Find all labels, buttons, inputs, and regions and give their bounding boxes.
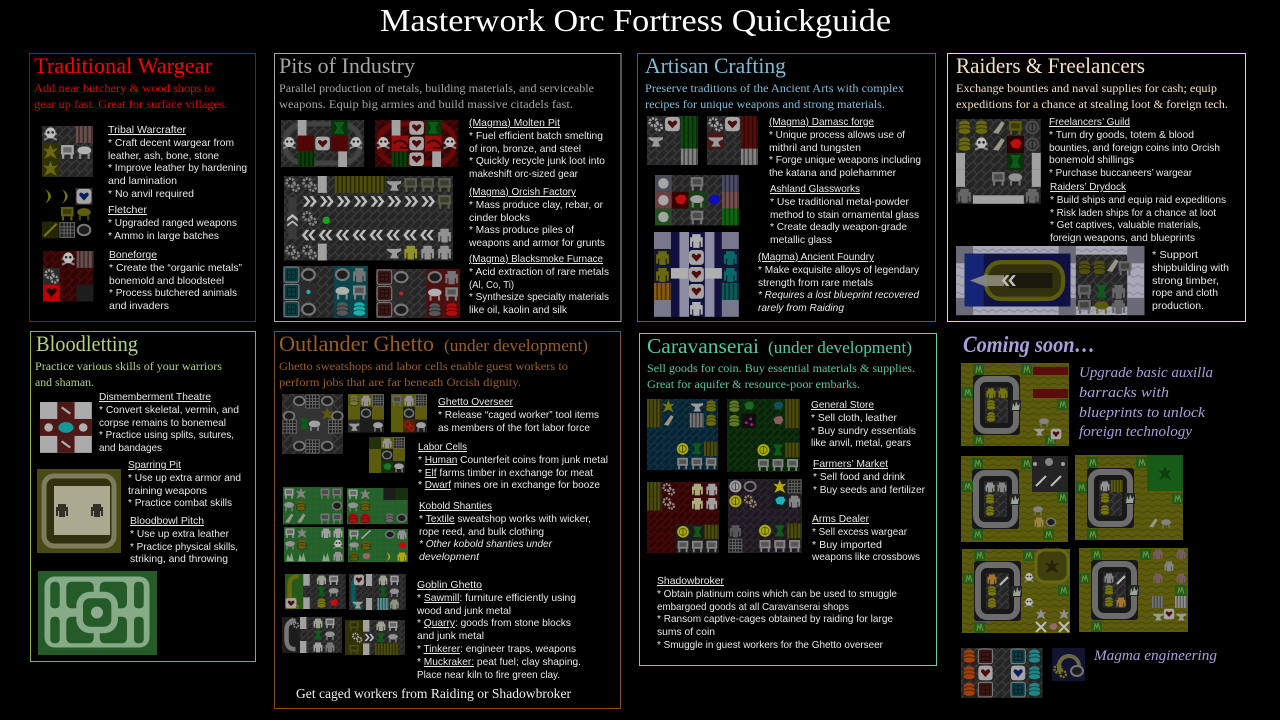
text block: Tribal Warcrafter: leather, ash, bone, stone (108, 151, 219, 162)
heading: Caravanserai: Caravanserai (647, 334, 759, 358)
text block: General Store: * Sell cloth, leather (811, 413, 898, 424)
intro text: and shaman. (35, 375, 94, 389)
intro text (35, 359, 222, 389)
intro text: Parallel production of metals, building materials, and serviceable (279, 81, 594, 95)
heading: Bloodletting: Bloodletting (36, 331, 138, 356)
text block: barracks upgrade note: barracks with (1079, 385, 1169, 401)
text block: Ancient Foundry: strength from rare metals (758, 278, 873, 289)
text block: Ashland Glassworks (770, 184, 919, 246)
text block: Labor Cells: Labor Cells (418, 442, 467, 453)
text block: Boneforge: * Create the “organic metals” (109, 263, 243, 274)
heading: Caravanserai (647, 334, 912, 358)
text block: Tribal Warcrafter: * Improve leather by hardening (108, 163, 247, 174)
intro text: weapons. Equip big armies and build massive citadels fast. (279, 97, 573, 111)
text block: Raiders Drydock: foreign weapons, and blueprints (1050, 233, 1195, 244)
icon: general store layout (647, 399, 718, 470)
text block: Orcish Factory: weapons and armor for grunts (468, 238, 605, 249)
text block: Bloodbowl Pitch: * Practice physical skills, (130, 542, 238, 553)
text block: Freelancers Guild: * Purchase buccaneers’ wargear (1049, 168, 1193, 179)
text block: Bloodbowl Pitch: striking, and throwing (130, 554, 228, 565)
intro text: Practice various skills of your warriors (35, 359, 222, 373)
heading: Caravanserai: (under development) (768, 338, 912, 357)
text block: General Store (811, 400, 916, 449)
icon: raiders drydock layout (956, 246, 1144, 315)
text block: Kobold Shanties: rope reed, and bulk clothing (419, 527, 544, 538)
text block: Fletcher: * Upgraded ranged weapons (108, 218, 237, 229)
text block: Boneforge (109, 250, 243, 312)
icon: farmers market layout (727, 399, 800, 472)
text block: Arms Dealer: Arms Dealer (812, 514, 870, 525)
text block: Goblin Ghetto: * Sawmill: furniture efficiently using (417, 593, 576, 604)
icon: upgraded barracks D (962, 549, 1070, 633)
text block: Blacksmoke Furnace: (Al, Co, Ti) (469, 280, 514, 291)
text block: Molten Pit: (Magma) Molten Pit (469, 118, 560, 129)
text block: Arms Dealer: weapons like crossbows (811, 552, 920, 563)
text block: General Store: like anvil, metal, gears (811, 438, 911, 449)
text block: Arms Dealer: * Buy imported (812, 540, 882, 551)
text block: Molten Pit: * Fuel efficient batch smelting (469, 131, 603, 142)
text block: Ashland Glassworks: Ashland Glassworks (770, 184, 860, 195)
text block: Ashland Glassworks: method to stain ornamental glass (770, 210, 919, 221)
text block: Boneforge: bonemold and bloodsteel (109, 276, 224, 287)
panel: Outlander Ghetto (274, 331, 620, 708)
text block: Dismemberment Theatre: corpse remains to bonemeal (99, 418, 226, 429)
text block: Fletcher: * Ammo in large batches (108, 231, 219, 242)
text block: Fletcher: Fletcher (108, 205, 148, 216)
heading: Pits of Industry: Pits of Industry (279, 53, 415, 78)
text block: Tribal Warcrafter (108, 125, 247, 200)
panel: Bloodletting (30, 331, 256, 662)
heading: Raiders & Freelancers: Raiders & Freelancers (956, 53, 1145, 78)
icon: damasc forge layout (647, 116, 698, 165)
text block: Freelancers Guild: Freelancers’ Guild (1049, 117, 1130, 128)
text block: Ghetto Overseer: as members of the fort labor force (438, 423, 590, 434)
text block: Goblin Ghetto: * Muckraker: peat fuel; clay shaping. (417, 657, 581, 668)
panel: Traditional Wargear (30, 53, 256, 322)
text block: Blacksmoke Furnace: * Acid extraction of rare metals (469, 267, 609, 278)
text block: Molten Pit: of iron, bronze, and steel (469, 144, 581, 155)
heading: Outlander Ghetto (279, 331, 588, 356)
text block: Ghetto Overseer: * Release “caged worker” tool items (438, 410, 599, 421)
text block: Ancient Foundry: * Make exquisite alloys of legendary (758, 265, 920, 276)
icon: dismemberment theatre layout (40, 402, 92, 453)
heading: Outlander Ghetto: Outlander Ghetto (279, 331, 434, 356)
text block: Farmers Market: * Sell food and drink (813, 472, 906, 483)
text block: Sparring Pit: Sparring Pit (128, 460, 181, 471)
text block: Raiders Drydock: * Get captives, valuable materials, (1050, 220, 1201, 231)
text block: Shadowbroker: Shadowbroker (657, 576, 725, 587)
text block: barracks upgrade note: blueprints to unlock (1079, 405, 1205, 421)
icon: upgraded barracks C (1075, 455, 1183, 540)
intro text (645, 81, 904, 111)
icon: boneforge workshop (43, 251, 93, 301)
panel: Caravanserai (640, 334, 936, 666)
icon: labor cell 3 (369, 437, 405, 473)
text block: Goblin Ghetto: and junk metal (417, 631, 484, 642)
text block: Sparring Pit (128, 460, 241, 509)
text block: Arms Dealer: * Sell excess wargear (812, 527, 908, 538)
text block: Sparring Pit: * Use up extra armor and (128, 473, 241, 484)
text block: Shadowbroker: * Smuggle in guest workers for the Ghetto overseer (657, 640, 884, 651)
text block: Ghetto Overseer (438, 397, 599, 434)
intro text (647, 361, 915, 391)
text block: Shadowbroker: embargoed goods at all Caravanserai shops (657, 602, 849, 613)
text block: Shadowbroker: * Ransom captive-cages obtained by raiding for large (657, 614, 893, 625)
text block: Goblin Ghetto: Place near kiln to fire green clay. (417, 670, 560, 681)
icon: labor cell 2 (391, 394, 427, 432)
text block: Goblin Ghetto (416, 580, 581, 681)
icon: upgraded barracks E (1079, 548, 1188, 632)
text block: Kobold Shanties: * Textile sweatshop works with wicker, (419, 514, 591, 525)
text block: Blacksmoke Furnace (469, 254, 609, 316)
intro text: Ghetto sweatshops and labor cells enable guest workers to (279, 359, 568, 373)
icon: magma molten pit layout (375, 120, 458, 167)
text block: Blacksmoke Furnace: (Magma) Blacksmoke Furnace (469, 254, 603, 265)
text block: Dismemberment Theatre: Dismemberment Theatre (99, 392, 211, 403)
text block: Damasc forge: the katana and polehammer (769, 168, 897, 179)
intro text (279, 81, 594, 111)
text block: Tribal Warcrafter: * No anvil required (108, 189, 194, 200)
icon: upgraded barracks A (961, 363, 1069, 446)
icon: goblin tinkerer (282, 617, 342, 653)
text block: Ashland Glassworks: metallic glass (770, 235, 832, 246)
panel: Artisan Crafting (638, 53, 936, 322)
text block: shipbuilding support: strong timber, (1152, 276, 1219, 287)
callout: caged workers: Get caged workers from Raiding or Shadowbroker (296, 686, 572, 701)
label: Magma engineering: Magma engineering (1093, 648, 1217, 664)
text block: Ancient Foundry: * Requires a lost blueprint recovered (758, 290, 920, 301)
icon: upgraded barracks B (961, 456, 1068, 542)
text block: Farmers Market: * Buy seeds and fertilizer (813, 485, 926, 496)
text block: Shadowbroker (657, 576, 897, 651)
text block: Raiders Drydock: Raiders’ Drydock (1050, 182, 1127, 193)
text block: Orcish Factory: * Mass produce piles of (469, 225, 574, 236)
icon: kobold shanty 4 (348, 529, 408, 562)
text block: Dismemberment Theatre: * Practice using splits, sutures, (99, 430, 234, 441)
text block: Kobold Shanties (419, 501, 591, 563)
panel: Raiders & Freelancers (948, 53, 1246, 322)
text block: Bloodbowl Pitch: Bloodbowl Pitch (130, 516, 204, 527)
text block: Blacksmoke Furnace: like oil, kaolin and silk (469, 305, 568, 316)
text block: barracks upgrade note: Upgrade basic auxilla (1079, 365, 1213, 381)
text block: Dismemberment Theatre: and bandages (99, 443, 162, 454)
text block: Sparring Pit: * Practice combat skills (128, 498, 232, 509)
intro text (34, 81, 227, 111)
intro text: Exchange bounties and naval supplies for cash; equip (956, 81, 1217, 95)
text block: Damasc forge: mithril and tungsten (769, 143, 861, 154)
intro text: perform jobs that are far beneath Orcish dignity. (279, 375, 521, 389)
text block: Labor Cells: * Dwarf mines ore in exchange for booze (418, 480, 600, 491)
icon: ashland glassworks layout (655, 175, 739, 225)
icon: fletcher workshop (42, 188, 92, 238)
icon: kobold shanty 2 (347, 488, 408, 524)
text block: shipbuilding support: shipbuilding with (1152, 263, 1229, 274)
icon: molten pit layout (281, 120, 364, 167)
text block: Ashland Glassworks: * Create deadly weapon-grade (770, 222, 907, 233)
icon: shadowbroker layout (728, 479, 802, 553)
text block: Dismemberment Theatre: * Convert skeletal, vermin, and (99, 405, 239, 416)
intro text (279, 359, 568, 389)
text block: Kobold Shanties: Kobold Shanties (419, 501, 492, 512)
intro text: Add near butchery & wood shops to (34, 81, 214, 95)
text block: shipbuilding support (1152, 250, 1229, 312)
text block: Damasc forge: (Magma) Damasc forge (769, 117, 874, 128)
text block: barracks upgrade note: foreign technology (1079, 424, 1192, 440)
text block: Ancient Foundry: rarely from Raiding (758, 303, 844, 314)
text block: Damasc forge: * Unique process allows use of (769, 130, 905, 141)
text block: Tribal Warcrafter: * Craft decent wargear from (108, 138, 234, 149)
icon: magma engineering pump (1052, 648, 1085, 681)
intro text (956, 81, 1228, 111)
text block: Ghetto Overseer: Ghetto Overseer (438, 397, 514, 408)
intro text: recipes for unique weapons and strong materials. (645, 97, 885, 111)
intro text: expeditions for a chance at stealing loot & foreign tech. (956, 97, 1228, 111)
text block: shipbuilding support: * Support (1152, 250, 1198, 261)
heading: Artisan Crafting: Artisan Crafting (645, 53, 786, 78)
text block: Boneforge: Boneforge (109, 250, 157, 261)
text block: Shadowbroker: * Obtain platinum coins which can be used to smuggle (657, 589, 897, 600)
icon: goblin muckraker (345, 620, 405, 655)
text block: Ashland Glassworks: * Use traditional metal-powder (770, 197, 910, 208)
text block: Orcish Factory: cinder blocks (469, 213, 530, 224)
icon: magma engineering furnace layout (961, 648, 1043, 698)
text block: General Store: General Store (811, 400, 874, 411)
panel: Pits of Industry (274, 53, 621, 322)
text block: Farmers Market: Farmers’ Market (813, 459, 888, 470)
text block: Orcish Factory: (Magma) Orcish Factory (469, 187, 577, 198)
text block: Ancient Foundry: (Magma) Ancient Foundry (758, 252, 875, 263)
text block: Goblin Ghetto: * Quarry: goods from stone blocks (417, 618, 571, 629)
icon: goblin quarry (349, 574, 406, 610)
icon: red blacksmoke furnace layout (376, 269, 460, 318)
text block: Kobold Shanties: * Other kobold shanties under (419, 539, 553, 550)
text block: Molten Pit: * Quickly recycle junk loot into (469, 156, 605, 167)
text block: Sparring Pit: training weapons (128, 486, 207, 497)
text block: shipbuilding support: rope and cloth (1152, 288, 1218, 299)
intro text: Great for aquifer & resource-poor embarks. (647, 377, 860, 391)
text block: Arms Dealer (811, 514, 920, 563)
text block: Raiders Drydock: * Risk laden ships for a chance at loot (1050, 208, 1216, 219)
icon: sparring pit layout (37, 469, 121, 553)
text block: Tribal Warcrafter: Tribal Warcrafter (108, 125, 187, 136)
text block: Freelancers Guild (1049, 117, 1220, 179)
text block: barracks upgrade note (1079, 365, 1213, 440)
text block: Boneforge: and invaders (109, 301, 169, 312)
intro text: Sell goods for coin. Buy essential materials & supplies. (647, 361, 915, 375)
text block: Blacksmoke Furnace: * Synthesize specialty materials (469, 292, 609, 303)
panel: Coming soon (961, 332, 1217, 698)
text block: Labor Cells (418, 442, 608, 491)
text block: Labor Cells: * Human Counterfeit coins from junk metal (418, 455, 608, 466)
heading: Coming soon: Coming soon… (963, 332, 1095, 357)
text block: Damasc forge (769, 117, 921, 179)
icon: orcish factory layout (284, 176, 453, 260)
text block: Freelancers Guild: * Turn dry goods, totem & blood (1049, 130, 1194, 141)
text block: Damasc forge: * Forge unique weapons including (769, 155, 921, 166)
icon: arms dealer layout (647, 482, 719, 553)
icon: goblin sawmill (285, 574, 346, 609)
icon: kobold shanty 1 (283, 487, 343, 524)
text block: Boneforge: * Process butchered animals (109, 288, 237, 299)
text block: Ancient Foundry (758, 252, 920, 314)
text block: General Store: * Buy sundry essentials (811, 426, 916, 437)
text block: Molten Pit: makeshift orc-sized gear (469, 169, 579, 180)
text block: Kobold Shanties: development (419, 552, 480, 563)
text block: Tribal Warcrafter: and lamination (108, 176, 177, 187)
icon: tribal warcrafter workshop (42, 126, 93, 177)
text block: Bloodbowl Pitch: * Use up extra leather (130, 529, 230, 540)
text block: Farmers Market (813, 459, 926, 496)
text block: Raiders Drydock (1050, 182, 1226, 244)
title: Masterwork Orc Fortress Quickguide (380, 2, 891, 38)
text block: Goblin Ghetto: * Tinkerer: engineer traps, weapons (417, 644, 576, 655)
text block: Dismemberment Theatre (99, 392, 239, 454)
icon: ghetto overseer layout (282, 394, 343, 454)
heading: Traditional Wargear: Traditional Wargear (34, 53, 213, 78)
icon: magma damasc forge layout (707, 116, 758, 165)
icon: ancient foundry layout (654, 232, 739, 317)
text block: Fletcher (108, 205, 237, 242)
text block: shipbuilding support: production. (1152, 301, 1204, 312)
text block: Molten Pit (469, 118, 605, 180)
text block: Labor Cells: * Elf farms timber in exchange for meat (418, 468, 593, 479)
text block: Orcish Factory: * Mass produce clay, rebar, or (469, 200, 604, 211)
text block: Shadowbroker: sums of coin (657, 627, 715, 638)
text block: Goblin Ghetto: Goblin Ghetto (417, 580, 482, 591)
intro text: Preserve traditions of the Ancient Arts with complex (645, 81, 904, 95)
text block: Bloodbowl Pitch (130, 516, 238, 565)
intro text: gear up fast. Great for surface villages. (34, 97, 227, 111)
text block: Freelancers Guild: bonemold shillings (1049, 155, 1134, 166)
heading: Outlander Ghetto: (under development) (444, 336, 588, 355)
icon: acid blacksmoke furnace layout (283, 266, 368, 318)
text block: Orcish Factory (468, 187, 605, 249)
text block: Freelancers Guild: bounties, and foreign coins into Orcish (1049, 143, 1220, 154)
icon: kobold shanty 3 (284, 527, 344, 562)
icon: freelancers guild layout (956, 119, 1041, 204)
icon: bloodbowl pitch layout (38, 571, 157, 655)
icon: labor cell 1 (348, 394, 384, 432)
text block: Goblin Ghetto: wood and junk metal (416, 606, 511, 617)
text block: Raiders Drydock: * Build ships and equip raid expeditions (1050, 195, 1226, 206)
